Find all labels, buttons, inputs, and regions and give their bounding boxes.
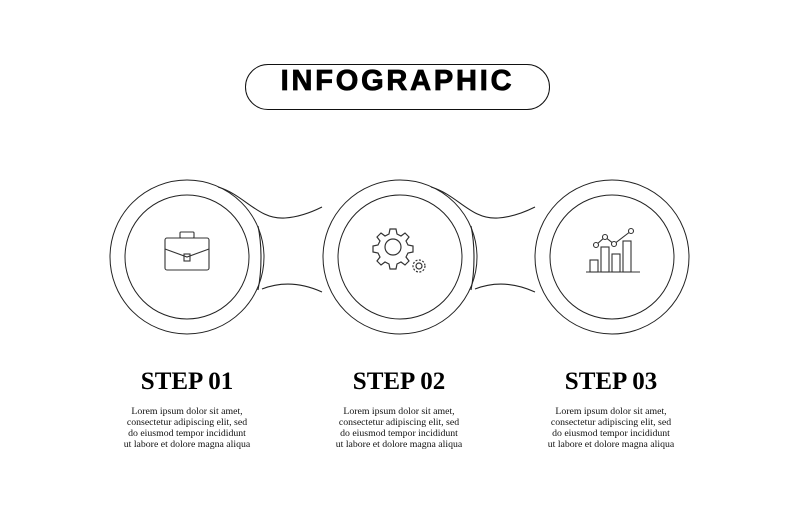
icon: briefcase xyxy=(165,232,209,270)
step 2 text: ut labore et dolore magna aliqua xyxy=(336,439,462,450)
step 1 heading: STEP 01 xyxy=(141,368,233,395)
step 1 text: ut labore et dolore magna aliqua xyxy=(124,439,250,450)
icon: bar chart xyxy=(586,228,640,272)
circle 3 xyxy=(535,180,689,334)
circle 2 xyxy=(323,180,477,334)
step 1 text: consectetur adipiscing elit, sed xyxy=(127,417,247,428)
step 2 text: Lorem ipsum dolor sit amet, xyxy=(343,406,455,417)
title xyxy=(245,64,550,110)
step 1 text: do eiusmod tempor incididunt xyxy=(128,428,246,439)
title: INFOGRAPHIC xyxy=(281,65,514,97)
step 3 text: do eiusmod tempor incididunt xyxy=(552,428,670,439)
step 1 text xyxy=(124,406,250,450)
circle 1 xyxy=(110,180,264,334)
step 3 text: consectetur adipiscing elit, sed xyxy=(551,417,671,428)
step 3 text: Lorem ipsum dolor sit amet, xyxy=(555,406,667,417)
step 3 text xyxy=(548,406,674,450)
step 2 heading: STEP 02 xyxy=(353,368,445,395)
connector curves xyxy=(218,187,535,292)
step 2 text: do eiusmod tempor incididunt xyxy=(340,428,458,439)
step 2 text xyxy=(336,406,462,450)
step 1 text: Lorem ipsum dolor sit amet, xyxy=(131,406,243,417)
icon: gears xyxy=(373,229,425,272)
step 3 heading: STEP 03 xyxy=(565,368,657,395)
step 3 text: ut labore et dolore magna aliqua xyxy=(548,439,674,450)
step 2 text: consectetur adipiscing elit, sed xyxy=(339,417,459,428)
